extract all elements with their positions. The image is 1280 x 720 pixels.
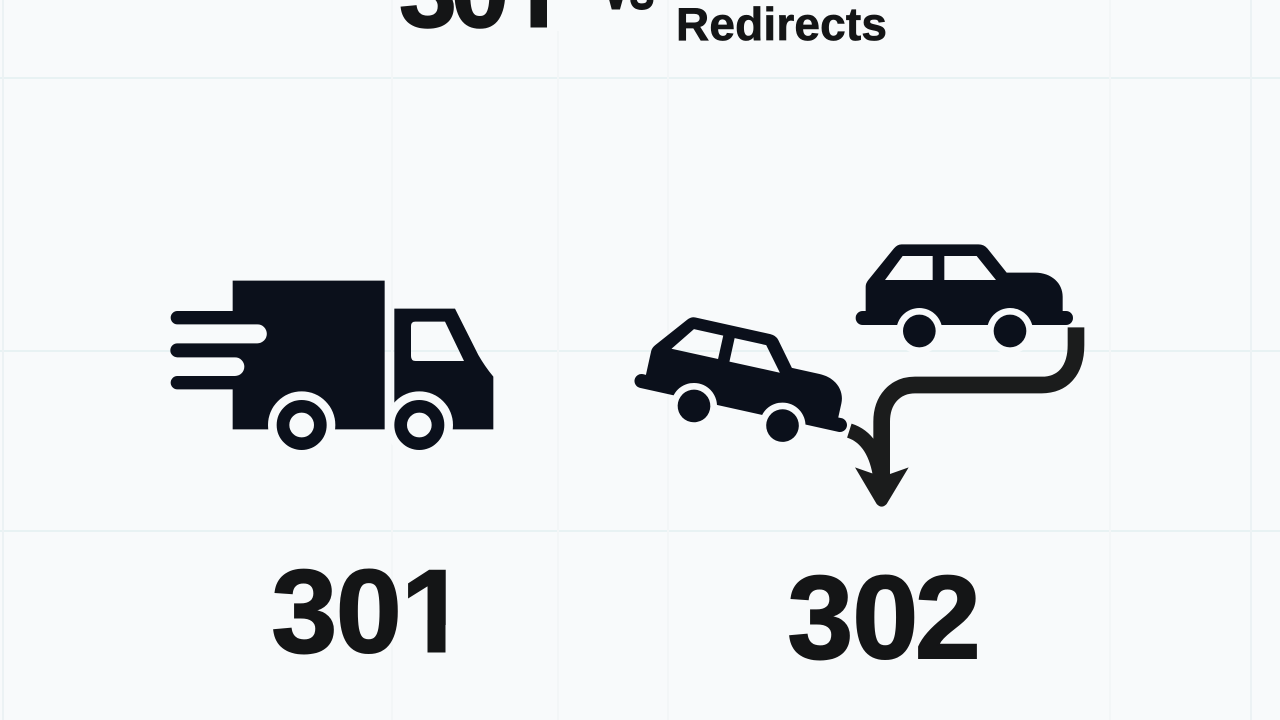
lower car body <box>633 308 863 433</box>
label: 301: 301 <box>272 546 467 678</box>
upper car wheel arches <box>896 308 942 354</box>
lower car wheel arches <box>667 379 721 433</box>
wheel arch cutouts <box>268 391 335 459</box>
upper car body <box>856 244 1073 325</box>
title: 301 vs Redirects <box>399 0 887 50</box>
truck cargo box with speed lines <box>170 281 385 429</box>
upper car wheels <box>903 315 936 347</box>
arrow head <box>855 467 909 507</box>
icon: cars and detour arrow for 302 <box>627 244 1076 507</box>
truck front wheel <box>401 406 438 444</box>
icon: fast delivery truck for 301 <box>170 281 493 459</box>
upper car <box>856 244 1073 354</box>
lower tilted car <box>627 308 863 462</box>
detour arrow <box>849 327 1076 487</box>
truck cab <box>394 309 493 429</box>
lower car wheels <box>675 386 713 425</box>
label: 302: 302 <box>788 552 981 684</box>
truck rear wheel <box>283 406 320 444</box>
